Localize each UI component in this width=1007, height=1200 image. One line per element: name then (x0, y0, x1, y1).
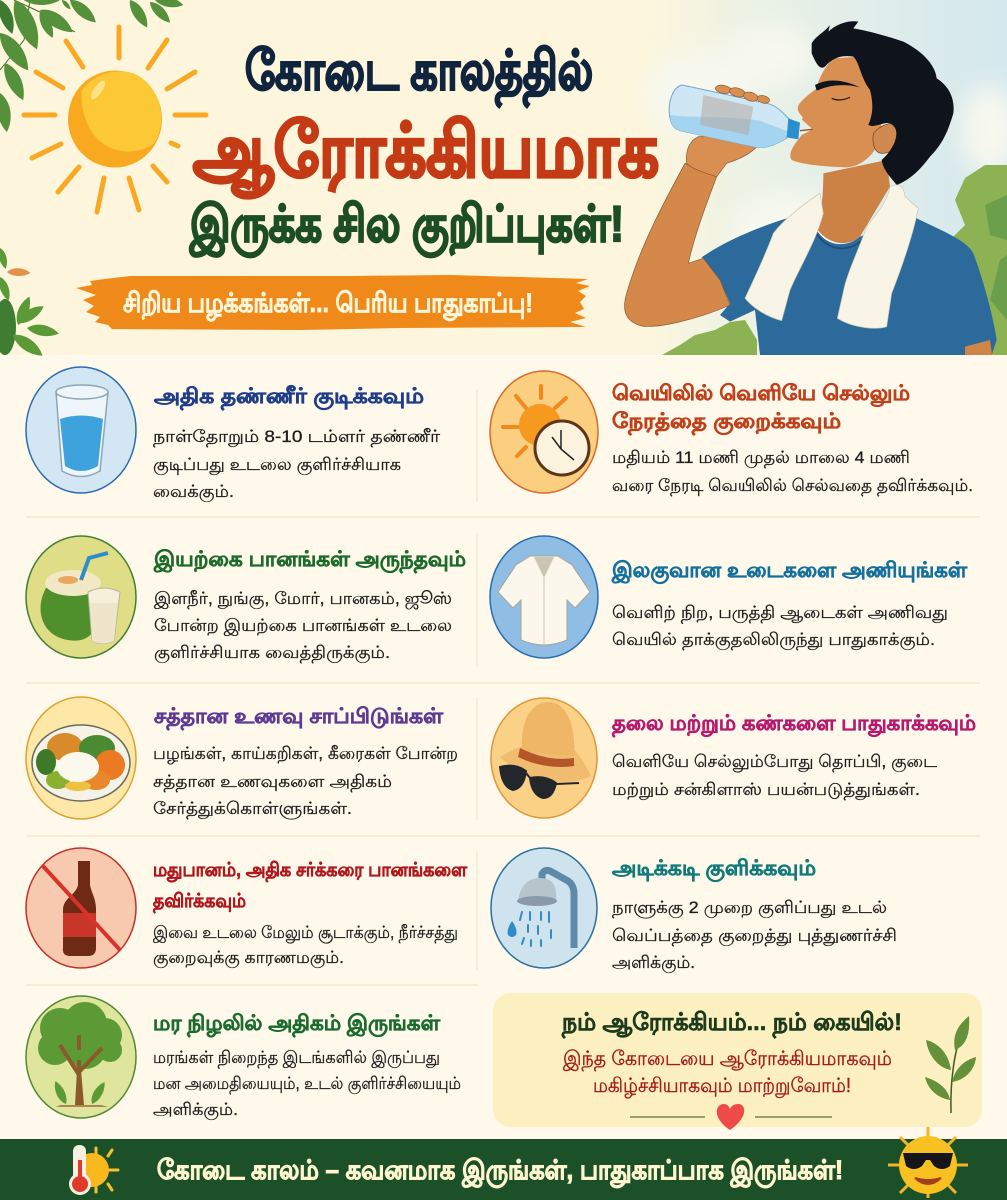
description (154, 589, 452, 663)
callout panel (493, 993, 982, 1130)
subtitle banner (76, 275, 590, 330)
callout heading: நம் ஆரோக்கியம்... நம் கையில்! (561, 1009, 902, 1039)
leaves left (0, 247, 60, 360)
description: இளநீர், நுங்கு, மோர், பானகம், ஜூஸ் (154, 589, 452, 610)
illustration: man drinking water (625, 21, 997, 355)
heading: மதுபானம், அதிக சர்க்கரை பானங்களை (153, 860, 468, 883)
heading (153, 860, 468, 914)
description: வெளிற் நிற, பருத்தி ஆடைகள் அணிவது (612, 603, 948, 624)
leaves top left (0, 0, 184, 133)
description: இவை உடலை மேலும் சூடாக்கும், நீர்ச்சத்து (153, 923, 458, 943)
description (612, 898, 897, 973)
description: வைக்கும். (153, 482, 234, 502)
description (612, 448, 973, 495)
callout text (563, 1048, 892, 1098)
description: சத்தான உணவுகளை அதிகம் (153, 772, 392, 791)
tip: nutritious food (26, 697, 458, 819)
callout text: மகிழ்ச்சியாகவும் மாற்றுவோம்! (593, 1075, 851, 1098)
icon: sun and clock (490, 371, 598, 493)
description: போன்ற இயற்கை பானங்கள் உடலை (154, 616, 452, 636)
description (153, 923, 458, 968)
icon: hat and sunglasses (491, 698, 597, 818)
towel left (745, 193, 823, 321)
heading: தலை மற்றும் கண்களை பாதுகாக்கவும் (612, 712, 976, 738)
description: அளிக்கும். (153, 1100, 238, 1120)
foliage right (662, 165, 1007, 355)
callout text: இந்த கோடையை ஆரோக்கியமாகவும் (563, 1048, 892, 1071)
heading: அடிக்கடி குளிக்கவும் (612, 857, 816, 882)
description: மற்றும் சன்கிளாஸ் பயன்படுத்துங்கள். (612, 780, 920, 800)
heading: நேரத்தை குறைக்கவும் (612, 410, 841, 436)
description: பழங்கள், காய்கறிகள், கீரைகள் போன்ற (153, 744, 458, 763)
description: மதியம் 11 மணி முதல் மாலை 4 மணி (612, 448, 910, 468)
description: குளிர்ச்சியாக வைத்திருக்கும். (154, 643, 390, 663)
description (153, 427, 440, 502)
description (153, 1048, 461, 1120)
description: மன அமைதியையும், உடல் குளிர்ச்சியையும் (153, 1074, 461, 1094)
footer bar (0, 1127, 1007, 1200)
icon: shirt (490, 536, 598, 658)
heading (612, 382, 910, 436)
heading: அதிக தண்ணீர் குடிக்கவும் (154, 385, 424, 411)
icon: food plate (26, 697, 136, 819)
towel right (837, 185, 918, 328)
icon: sun with sunglasses (888, 1127, 968, 1198)
tip: bathe often (491, 848, 897, 973)
heading: வெயிலில் வெளியே செல்லும் (612, 382, 910, 407)
description: வெப்பத்தை குறைத்து புத்துணர்ச்சி (612, 926, 897, 946)
description (612, 603, 948, 650)
title line 3: இருக்க சில குறிப்புகள்! (189, 196, 624, 257)
description: அளிக்கும். (612, 953, 695, 973)
description (153, 744, 458, 819)
header background (0, 0, 1007, 355)
description: மரங்கள் நிறைந்த இடங்களில் இருப்பது (153, 1048, 440, 1069)
tip: natural drinks (26, 536, 466, 663)
icon: heart with lines (630, 1104, 832, 1130)
tip: reduce sun exposure (490, 371, 973, 495)
tip: drink water (26, 367, 440, 502)
subtitle banner: சிறிய பழக்கங்கள்... பெரிய பாதுகாப்பு! (123, 288, 533, 322)
description: சேர்த்துக்கொள்ளுங்கள். (153, 799, 352, 819)
tip: light clothing (490, 536, 968, 658)
description: நாள்தோறும் 8-10 டம்ளர் தண்ணீர் (153, 427, 440, 447)
description: வரை நேரடி வெயிலில் செல்வதை தவிர்க்கவும். (612, 476, 973, 495)
icon: crossed bottle (26, 848, 136, 968)
water bottle (669, 85, 800, 148)
tip: tree shade (26, 996, 461, 1120)
icon: glass of water (26, 367, 136, 493)
footer text: கோடை காலம் – கவனமாக இருங்கள், பாதுகாப்பாக இருங்கள்! (157, 1155, 843, 1188)
description (612, 752, 937, 800)
icon: plant sprig (925, 1016, 976, 1113)
title line 1: கோடை காலத்தில் (245, 41, 593, 109)
dividers (26, 390, 980, 985)
heading: இயற்கை பானங்கள் அருந்தவும் (153, 548, 466, 574)
illustration: sun (24, 27, 206, 212)
icon: shower (491, 848, 597, 968)
icon: thermometer with sun (69, 1145, 118, 1195)
description: நாளுக்கு 2 முறை குளிப்பது உடல் (612, 898, 887, 918)
heading: மர நிழலில் அதிகம் இருங்கள் (153, 1012, 441, 1038)
description: குறைவுக்கு காரணமகும். (153, 948, 344, 968)
heading: இலகுவான உடைகளை அணியுங்கள் (611, 559, 968, 584)
title line 2: ஆரோக்கியமாக (193, 109, 659, 199)
heading: தவிர்க்கவும் (153, 891, 246, 914)
icon: coconut and glass (26, 536, 136, 658)
tip: protect head and eyes (491, 698, 976, 818)
description: குடிப்பது உடலை குளிர்ச்சியாக (153, 455, 401, 475)
tip: avoid alcohol and sugary drinks (26, 848, 468, 968)
icon: tree (26, 996, 136, 1118)
heading: சத்தான உணவு சாப்பிடுங்கள் (154, 705, 444, 731)
description: வெயில் தாக்குதலிலிருந்து பாதுகாக்கும். (612, 630, 935, 650)
description: வெளியே செல்லும்போது தொப்பி, குடை (612, 752, 937, 772)
